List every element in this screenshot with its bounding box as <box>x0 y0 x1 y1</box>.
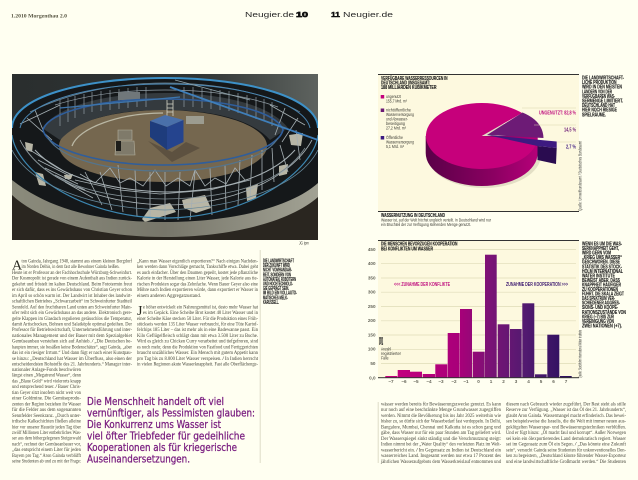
article column 3: wässer werden bereits für Bewässerungszwecke genutzt. Es kann <box>381 402 501 408</box>
pie chart caption: WASSERNUTZUNG IN DEUTSCHLAND <box>381 213 445 219</box>
legend: nichtöffentliche <box>386 108 412 112</box>
pull quote: vernünftiger, als Pessimisten glauben: <box>87 406 255 420</box>
article column 4: und eine landwirtschaftliche Großmacht werden.“ Die Studenten <box>506 459 626 465</box>
pull quote: Kooperationen als für kriegerische <box>87 441 237 454</box>
article column 2: „Kann man Wasser eigentlich exportieren?“ Nach einigen Nachden- <box>137 258 258 264</box>
y-axis labels: 0,0 <box>369 376 376 380</box>
drop cap J: J <box>137 304 143 319</box>
article column 2: in vielen Regionen akute Wasserknappheit. Fast alle Oberflächenge- <box>137 362 258 368</box>
heading: bar chart title: BEI KONFLIKTEN UM WASSER <box>381 246 433 252</box>
article column 4: sen beispielsweise die Israelis, die die Welt mit immer neuen aus- <box>506 420 626 425</box>
article column 1: zenten der Region beziehen ihr Wasser <box>12 402 81 407</box>
x-axis labels: −7 <box>388 379 394 384</box>
heading: bar chart title <box>381 242 458 252</box>
sidebar: cooperation note: BEWEIST ABER, DASS <box>582 278 620 284</box>
article column 1: das „Blaue Gold“ wird vielerorts knapp <box>12 378 81 384</box>
panel: water resources pie chart <box>378 74 579 212</box>
sidebar: cooperation note: HOLM INTERNATIONAL <box>582 269 623 275</box>
article column 3: gäbe, dass Wasser nur für ein paar Stunden am Tag geliefert wird. <box>381 431 501 436</box>
sidebar: agriculture note: VERFÜGBAREN WAS- <box>582 93 615 100</box>
article column 1: haupten immer, sie besäßen keine Bodenschätze“, sagt Gainda, „aber <box>12 344 132 350</box>
legend: und Abwasser- <box>386 116 408 122</box>
article column 1 <box>12 258 133 465</box>
cooperation direction label: ZUNAHME DER KOOPERATION >>> <box>506 282 568 288</box>
article column 1: ser aus dem höhergelegenen Steigerwald <box>12 437 81 442</box>
article column 2: Wird es gleich zu Chicken Curry verarbeitet und tiefgefroren, sind <box>137 340 258 345</box>
sidebar: agriculture note: WIRD IN DEN MEISTEN <box>582 85 622 91</box>
article column 4: Und er fügt hinzu: „Öl macht faul und korrupt“. Außer Norwegen <box>506 430 626 436</box>
panel: conflict and cooperation bar chart <box>378 240 579 378</box>
legend: 27,2 Mrd. m³ <box>386 126 406 130</box>
vertical credit: bar chart: Quelle: Stockholm International Water Institute <box>578 330 582 378</box>
sidebar: cooperation note: SCHIEDENER AGGRES- <box>582 301 620 307</box>
concrete rim <box>12 180 318 237</box>
article column 3: Der Wasserspiegel sinkt ständig und die Verschmutzung steigt: <box>381 437 501 442</box>
pie value labels <box>522 108 576 150</box>
x-axis labels: −5 <box>413 379 419 384</box>
article column 1: Sennfelder Seenkranz. „Durch unter- <box>12 414 81 419</box>
photo: rotary milking carousel <box>12 74 318 240</box>
article column 4: sei kein ein ölexportierendes Land demokratisch regiert. Wasser <box>506 437 626 442</box>
article column 3 <box>380 402 502 465</box>
article column 3: wasserreiches Land. Insgesamt werden nur etwa 17 Prozent des <box>381 454 501 459</box>
pie chart <box>426 103 557 188</box>
article column 1: damit Artischocken, Bohnen und Salatköpfe optimal gedeihen. Der <box>12 322 132 328</box>
article column 3: nur noch auf eine beschränkte Menge Grundwasser zugegriffen <box>381 408 501 413</box>
column rule <box>260 250 261 463</box>
photo caption sidebar: NICHT VOMHANDAR- <box>263 268 292 274</box>
article column 1: Professor für Betriebswirtschaft, Unternehmensführung und inter- <box>12 328 132 333</box>
y-axis labels: 350 <box>368 275 376 280</box>
article column 1: nach“, rechnet der Gemüseanbauer vor, <box>12 441 81 447</box>
article column 1: gelte Klappen im Glasdach regulieren geräuschlos die Temperatur, <box>12 317 132 322</box>
sidebar: cooperation note: ZU KOOPERATIONEN <box>582 287 618 293</box>
photo caption sidebar: AUTOMATEN, ROBOTERN <box>263 277 296 283</box>
article column 1: das ist ein riesiger Irrtum.“ Und dann fügt er nach einer Kunstpau- <box>12 350 132 356</box>
article column 4: Reserve zur Verfügung. „Wasser ist das Öl des 21. Jahrhunderts“, <box>506 407 626 413</box>
sidebar: agriculture note: LÄNDERN VON DER <box>582 88 612 95</box>
legend: 155,7 Mrd. m³ <box>386 98 407 104</box>
article column 1: für die Felder aus dem sogenannten <box>12 408 81 413</box>
legend: ungenutzt <box>386 94 402 99</box>
article column 4 <box>506 402 627 465</box>
article column 4: sein“, versucht Gainda seine Studenten für unkonventionelles Den- <box>506 447 626 453</box>
pull quote: viel öfter Triebfeder für gedeihliche <box>87 430 245 442</box>
y-axis labels: 50 <box>370 361 376 366</box>
article column 1: „das entspricht einem Liter für jeden <box>12 448 81 453</box>
article column 4: sei im Gegensatz zum Öl ein Segen. / „Das könnte eine Zukunft <box>506 442 627 448</box>
pie chart caption <box>381 213 491 227</box>
pie value labels: 14,5 % <box>564 128 576 134</box>
y-axis note <box>379 337 402 360</box>
sidebar: agriculture note: SPIELRÄUME. <box>582 111 606 118</box>
axis line <box>378 377 579 378</box>
article column 1: im April so schön warm ist. Der Landwirt ist Inhaber des landwirt- <box>12 294 132 299</box>
heading: bar chart title: DIE MENSCHEN BEVORZUGEN KOOPERATION <box>381 242 458 248</box>
article column 2: Kilo Geflügelfleisch schlägt dann mit etwa 3.500 Liter zu Buche. <box>137 334 258 339</box>
sidebar: cooperation note: WENN ES UM DIE WAS- <box>582 242 622 248</box>
pie value labels: 2,7 % <box>566 144 576 150</box>
machine <box>115 130 135 155</box>
article column 3: wasserbericht ein. / Im Gegensatz zu Indien ist Deutschland ein <box>381 448 501 453</box>
ladder <box>167 100 173 116</box>
article column 1: seine Studenten ab und zu mit der Frage: <box>12 460 81 465</box>
y-axis labels: 400 <box>368 261 376 266</box>
header: page 11 label: Neugier.de <box>343 10 393 19</box>
article column 3: bisher zu, so dürfte sich der Wasserbedarf fast verdoppeln. In Delhi, <box>381 420 501 425</box>
article column 1: ufer reiht sich ein Gewächshaus an das andere. Elektronisch gere- <box>12 311 132 316</box>
x-axis labels: 2 <box>502 379 505 384</box>
sidebar: cooperation note: GESCHWOREN. DIESE <box>582 260 620 266</box>
sidebar: agriculture note <box>582 76 624 118</box>
article column 2: felchips 185 Liter – das ist mehr als in eine Badewanne passt. Ein <box>137 328 258 333</box>
y-axis note: Fälle <box>381 356 389 360</box>
y-axis labels: 250 <box>368 304 376 309</box>
sidebar: cooperation note: WIRD GERN VOM <box>582 251 611 257</box>
y-axis labels: 150 <box>368 332 376 337</box>
y-axis note: 2008 <box>379 337 385 345</box>
article column 1: einer Goldmine. Die Gemüseprodu- <box>12 397 81 402</box>
article column 2: ken werden dann Vorschläge gemacht, Tankschiffe etwa. Dabei geht <box>137 265 259 270</box>
article column 2: Kalorie in der Herstellung einen Liter Wasser, jede Kalorie aus tie- <box>137 277 258 282</box>
x-axis labels: 6 <box>552 379 555 384</box>
article column 3: Indien nimmt bei der „Water Quality“ den vorletzten Platz im Welt- <box>381 442 501 448</box>
article column 2: e höher entwickelt ein Nahrungsmittel ist, desto mehr Wasser hat <box>143 305 259 310</box>
conflict direction label: <<< ZUNAHME DER KONFLIKTE <box>394 282 450 288</box>
column rule <box>378 402 379 463</box>
spokes <box>20 105 312 220</box>
photo credit: JG Ipm <box>299 240 309 246</box>
article column 2: Möhre nach Indien exportieren würde, dann exportiert er Wasser in <box>137 288 258 293</box>
blue rails <box>12 78 318 218</box>
article column 3: werden. Nimmt die Bevölkerung bis ins Jahr 2025 weiterhin wie <box>381 414 502 419</box>
article column 1: schaftlichen Betriebes „Schwarzarbeit“ im Schweinfurter Stadtteil <box>12 299 133 305</box>
header: page 10 label: 10 <box>296 10 308 19</box>
article column 1: längst einen „Megatrend Wasser“, denn <box>12 373 81 379</box>
x-axis labels: 4 <box>527 379 530 384</box>
x-axis labels <box>388 379 568 384</box>
photo caption sidebar: MATISCHES MELK- <box>263 295 288 301</box>
x-axis labels: 1 <box>490 379 493 384</box>
header: page 11 label <box>331 10 393 19</box>
sidebar: cooperation note: STATISTIK DES STOCK- <box>582 264 622 270</box>
y-axis labels <box>368 247 376 380</box>
photo caption sidebar: DIE LANDWIRTSCHAFT <box>263 258 294 264</box>
article column 1: zwölf Millionen Liter entbehrliches Was- <box>12 431 81 436</box>
article column 1: tian Geyer sitzt insofern nicht weit von <box>12 391 81 396</box>
sidebar: cooperation note: ZWEI NATIONEN (+7). <box>582 324 622 330</box>
sidebar: cooperation note: KRIEG (–7) BIS ZUR <box>582 314 614 320</box>
article column 1: Der Kosmopolit ist gerade von einem Aufenthalt aus Indien zurück- <box>12 277 132 282</box>
sidebar: cooperation note: SIONS- UND KOOPE- <box>582 305 618 311</box>
header: page 10 label: Neugier.de <box>245 10 294 19</box>
article column 1: gekehrt und fröstelt im kalten Deutschland. Beim Fototermin freut <box>12 282 133 287</box>
vertical credit: pie chart: Quelle: Umweltbundesamt / Statistisches Bundesamt <box>578 140 582 211</box>
sidebar: cooperation note: VEREINIGUNG VON <box>582 319 614 325</box>
article column 2: stückseis werden 135 Liter Wasser verbraucht, für eine Tüte Kartof- <box>137 322 258 328</box>
article column 1: er sich dafür, dass es ins Gewächshaus von Christian Geyer schon <box>12 288 132 293</box>
article column 1: Heute ist er Professor an der Fachhochschule Würzburg-Schweinfurt. <box>12 271 132 276</box>
photo caption sidebar <box>263 258 297 306</box>
slice: 14.5 percent <box>487 112 544 138</box>
article column 1: se hinzu: „Deutschland hat Wasser im Überfluss, also einen der <box>12 356 132 362</box>
gridlines <box>381 249 576 364</box>
article column 1: und entsprechend teuer. / Bauer Chris- <box>12 385 81 390</box>
article column 1: irdische Kalkschichten fließen alleine <box>12 420 82 424</box>
pie chart caption: ein Bruchteil der zur Verfügung stehenden Menge genutzt. <box>381 222 471 227</box>
legend: 5,1 Mrd. m³ <box>386 144 405 149</box>
article column 4: geklügelten Wasserspar- und Bewässerungstechniken verblüffen. <box>506 425 626 430</box>
article column 2: einer Scheibe Käse stecken 50 Liter. Für die Produktion eines Früh- <box>137 317 258 322</box>
photo caption sidebar: GIE GEPRÄGT SEIN. <box>263 285 289 292</box>
article column 1: nationaler Anlage-Fonds beschwören <box>12 368 81 373</box>
sidebar: cooperation note <box>582 242 626 330</box>
sidebar: cooperation note: SERKNAPPHEIT GEHT, <box>582 246 619 252</box>
pull quote: Die Menschheit handelt oft viel <box>87 395 224 408</box>
photo caption sidebar: IM BILD EIN VOLLAUTO- <box>263 291 297 297</box>
sidebar: cooperation note: KNAPPHEIT HÄUFIGER <box>582 282 621 288</box>
article column 2: pro Tag bis zu 8.000 Liter Wasser verspeisen. / In Indien herrscht <box>137 357 259 362</box>
pie chart caption: Wasser ist, auf der Welt höchst ungleich verteilt. In Deutschland wird nur <box>381 218 491 222</box>
article column 1: Sennfeld. Auf den fruchtbaren Land unten am Schweinfurter Main- <box>12 305 132 310</box>
article column 2: braucht unzähliches Wasser. Ein Mensch mit gutem Appetit kann <box>137 351 258 356</box>
legend: Wasserversorgung <box>386 112 415 117</box>
article column 2: es auch einfacher. Über den Daumen gepeilt, kostet jede pflanzliche <box>137 270 259 276</box>
header: left folio: 1.2010 Morgenthau 2.0 <box>11 14 67 20</box>
slice: 2.7 percent <box>538 146 557 164</box>
legend: beseitigung <box>386 121 406 126</box>
y-axis labels: 100 <box>368 347 376 352</box>
article column 1: ton Gainda, Jahrgang 1948, stammt aus einem kleinen Bergdorf <box>22 260 132 264</box>
article column 1: im Norden Delhis, in dem fast alle Bewohner Gainda heißen. <box>22 265 120 270</box>
cows <box>25 133 303 222</box>
sidebar: agriculture note: HIER NOCH RIESIGE <box>582 108 617 114</box>
x-axis labels: −4 <box>426 379 432 384</box>
photo caption sidebar: BEIT, SONDERN VON <box>263 272 291 278</box>
heading: pie chart title: VERFÜGBARE WASSERRESSOURCEN IN <box>381 75 448 82</box>
heading: pie chart title <box>381 75 448 91</box>
article column 2: es im Gepäck. Eine Scheibe Brot kostet 40 Liter Wasser und in <box>143 311 258 316</box>
x-axis labels: −3 <box>438 379 444 384</box>
header: page 11 label: 11 <box>331 10 341 19</box>
y-axis labels: 450 <box>368 247 376 252</box>
sidebar: cooperation note: WATER INSTITUTE <box>582 273 615 279</box>
article column 2: einem anderen Aggregatzustand. <box>137 294 201 299</box>
x-axis labels: 3 <box>515 379 518 384</box>
bars <box>385 255 572 378</box>
photo caption sidebar: KARUSSELL. <box>263 300 279 306</box>
sidebar: agriculture note: LICHE PRODUKTION <box>582 80 617 86</box>
article column 2 <box>137 258 259 368</box>
article column 4: glaubt Aron Gainda. Wassermangel macht erfinderisch. Das bewei- <box>506 414 626 419</box>
x-axis labels: −6 <box>401 379 407 384</box>
heading: pie chart title: 188 MILLIARDEN KUBIKMETER <box>381 85 437 91</box>
pull quote: Die Konkurrenz ums Wasser ist <box>87 418 222 431</box>
article column 1: nationales Management und der Bauer mit dem Spezialgebiet <box>12 334 133 339</box>
sidebar: agriculture note: SERMENGE LIMITIERT. <box>582 98 623 104</box>
article column 1: hier vor unserer Haustür jeden Tag über <box>12 425 81 430</box>
article column 3: Bangalore, Mumbai, Chennai und Kalkutta ist es schon gang und <box>381 425 501 430</box>
legend: Öffentliche <box>386 135 404 140</box>
pull quote: Auseinandersetzungen. <box>87 452 190 466</box>
y-axis labels: 200 <box>368 318 376 323</box>
y-axis labels: 300 <box>368 290 376 295</box>
sidebar: agriculture note: DEUTSCHLAND HAT <box>582 103 615 109</box>
article column 1: entscheidendsten Rohstoffe des 21. Jahrhunderts.“ Manager inter- <box>12 362 132 368</box>
x-axis labels: 7 <box>565 379 568 384</box>
y-axis note: registrierter <box>381 351 402 356</box>
article column 4: diesem nach Gebrauch wieder zugeführt. Der Rest steht als stille <box>506 402 627 408</box>
legend <box>381 94 415 149</box>
article column 3: jährlichen Wasseraufgebots dem Wasserkreislauf entnommen und <box>380 460 501 465</box>
article column 2: rischen Produkten sogar das Zehnfache. Wenn Bauer Geyer also eine <box>137 282 259 287</box>
article column 1: Gemüseanbau verstehen sich auf Anhieb. / „Die Deutschen be- <box>12 340 132 345</box>
pull quote <box>87 395 255 466</box>
y-axis note: Anzahl <box>381 346 391 352</box>
sidebar: cooperation note: „KRIEG UMS WASSER“ <box>582 255 622 261</box>
photo caption sidebar: DER ZUKUNFT WIRD <box>263 263 290 269</box>
drop cap A: A <box>12 258 23 274</box>
x-axis labels: −2 <box>451 379 457 384</box>
x-axis labels: −1 <box>463 379 469 384</box>
pie value labels: UNGENUTZT: 82,8 % <box>539 110 576 116</box>
photo caption sidebar: UND HOCHTECHNOLO- <box>263 282 293 288</box>
legend: Wasserversorgung <box>386 140 415 144</box>
header: page 10 label <box>245 10 308 19</box>
article column 2: es noch mehr, denn die Produktion von Fastfood und Fertiggerichten <box>137 345 258 350</box>
x-axis labels: 5 <box>540 379 543 384</box>
x-axis labels: 0 <box>477 379 480 384</box>
sidebar: cooperation note: DAS SPEKTRUM VER- <box>582 296 615 302</box>
article column 1: Bayern pro Tag.“ Aron Gainda verblüfft <box>12 453 82 459</box>
heading: pie chart title: DEUTSCHLAND (INSGESAMT: <box>381 80 430 86</box>
